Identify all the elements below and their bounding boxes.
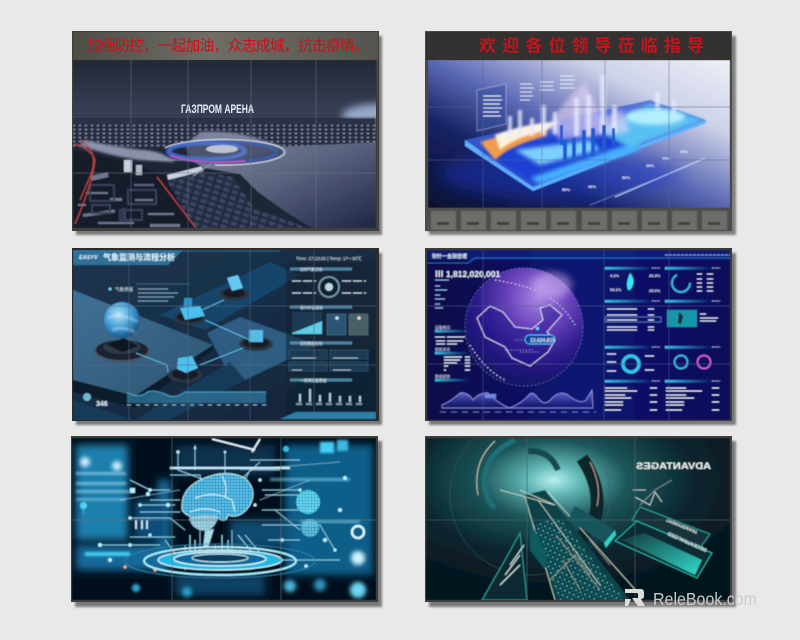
teal info cards: TRANSPARENT	[665, 517, 698, 535]
stadium ring	[162, 140, 285, 165]
watermark: ReleBook.com: ReleBook.com	[653, 589, 757, 609]
glowing rings	[125, 544, 315, 578]
right status column: 室内外温湿度	[300, 305, 323, 310]
right widgets: 53.1%	[610, 287, 622, 292]
teal info cards	[482, 506, 712, 600]
highway lines	[75, 140, 95, 224]
area chart	[435, 374, 596, 412]
bottom wave chart: 346	[96, 401, 108, 408]
circuit nodes	[98, 446, 347, 572]
left stats: 能耗排名	[435, 347, 450, 352]
header strip: EASYV	[79, 255, 99, 261]
right status column	[280, 262, 376, 419]
header band with red slogan: 加强防控，一起加油，众志成城，抗击疫情。	[87, 38, 369, 54]
white light bars	[212, 439, 260, 452]
header band with welcome slogan: 欢迎各位领导莅临指导	[479, 36, 704, 56]
panel: AI brain video wall	[71, 436, 382, 607]
header band with red slogan	[73, 32, 378, 60]
stats row on platform edge: 40%	[680, 149, 688, 154]
right status column: 实时数据分析	[300, 341, 323, 346]
data stream beam	[500, 490, 640, 600]
right status column: 一周降雨量数据	[300, 378, 327, 383]
panel: advantages video wall	[425, 415, 736, 607]
stats row on platform edge	[562, 149, 688, 192]
panel: arena video wall	[72, 31, 410, 235]
left stats	[435, 280, 470, 370]
stats row on platform edge: 70%	[662, 156, 670, 161]
right widgets: 4.2%	[610, 273, 620, 278]
label: climate: 气象预报	[115, 286, 133, 293]
header title: 财针一金融管理	[432, 253, 467, 260]
headline number: Ⅲ 1,812,020,001	[435, 269, 500, 279]
stats row on platform edge: 40%	[588, 184, 596, 189]
panel: data city video wall	[425, 31, 736, 235]
callout with total figure: 13,624,815	[530, 338, 555, 344]
callout with total figure	[525, 327, 555, 344]
arcs	[449, 438, 610, 576]
mirrored heading: ADVANTAGES	[636, 461, 711, 472]
screen: holographic city chart	[428, 60, 730, 208]
header strip	[73, 250, 280, 265]
area chart: 数据趋势	[435, 374, 450, 379]
small plane marker	[633, 490, 662, 505]
panel: global data dashboard	[425, 248, 736, 425]
right widgets: 26.3%	[649, 273, 661, 278]
panel: weather monitoring dashboard	[72, 248, 382, 425]
isometric nodes	[136, 275, 273, 382]
status time: Time: 17:13:26 | Temp: 17~-30℃	[296, 256, 362, 261]
left stats: 设备概况	[435, 325, 450, 330]
right widgets: 25.0%	[649, 288, 661, 293]
header title	[427, 253, 730, 263]
circuit traces	[100, 445, 340, 570]
globe with China outline	[465, 268, 583, 386]
data towers	[508, 75, 676, 160]
row of speaker units	[426, 208, 731, 231]
stats row on platform edge: 40%	[646, 163, 654, 168]
island	[167, 172, 307, 228]
teal info cards: DECENTRALIZED	[666, 530, 708, 553]
platform base	[465, 100, 706, 187]
floating text panel	[477, 76, 575, 131]
brain	[182, 473, 253, 548]
stats row on platform edge: 50%	[562, 187, 570, 192]
isometric slabs	[73, 290, 318, 420]
header band with welcome slogan	[426, 32, 731, 60]
bottom wave chart	[83, 391, 270, 408]
header strip: 气象监测与流程分析	[103, 252, 175, 262]
chevron stack	[530, 522, 548, 570]
label: climate	[108, 284, 190, 301]
blurred background lights	[76, 440, 373, 598]
right widgets	[605, 267, 720, 410]
right status column: 实时气象分析	[300, 267, 323, 272]
stats row on platform edge: 50%	[622, 175, 630, 180]
stadium title: ГАЗПРОМ АРЕНА	[181, 104, 254, 116]
dark city district	[73, 150, 200, 228]
flower network icons	[80, 490, 364, 538]
globe node	[94, 302, 150, 362]
screen: aerial city view	[73, 60, 376, 228]
